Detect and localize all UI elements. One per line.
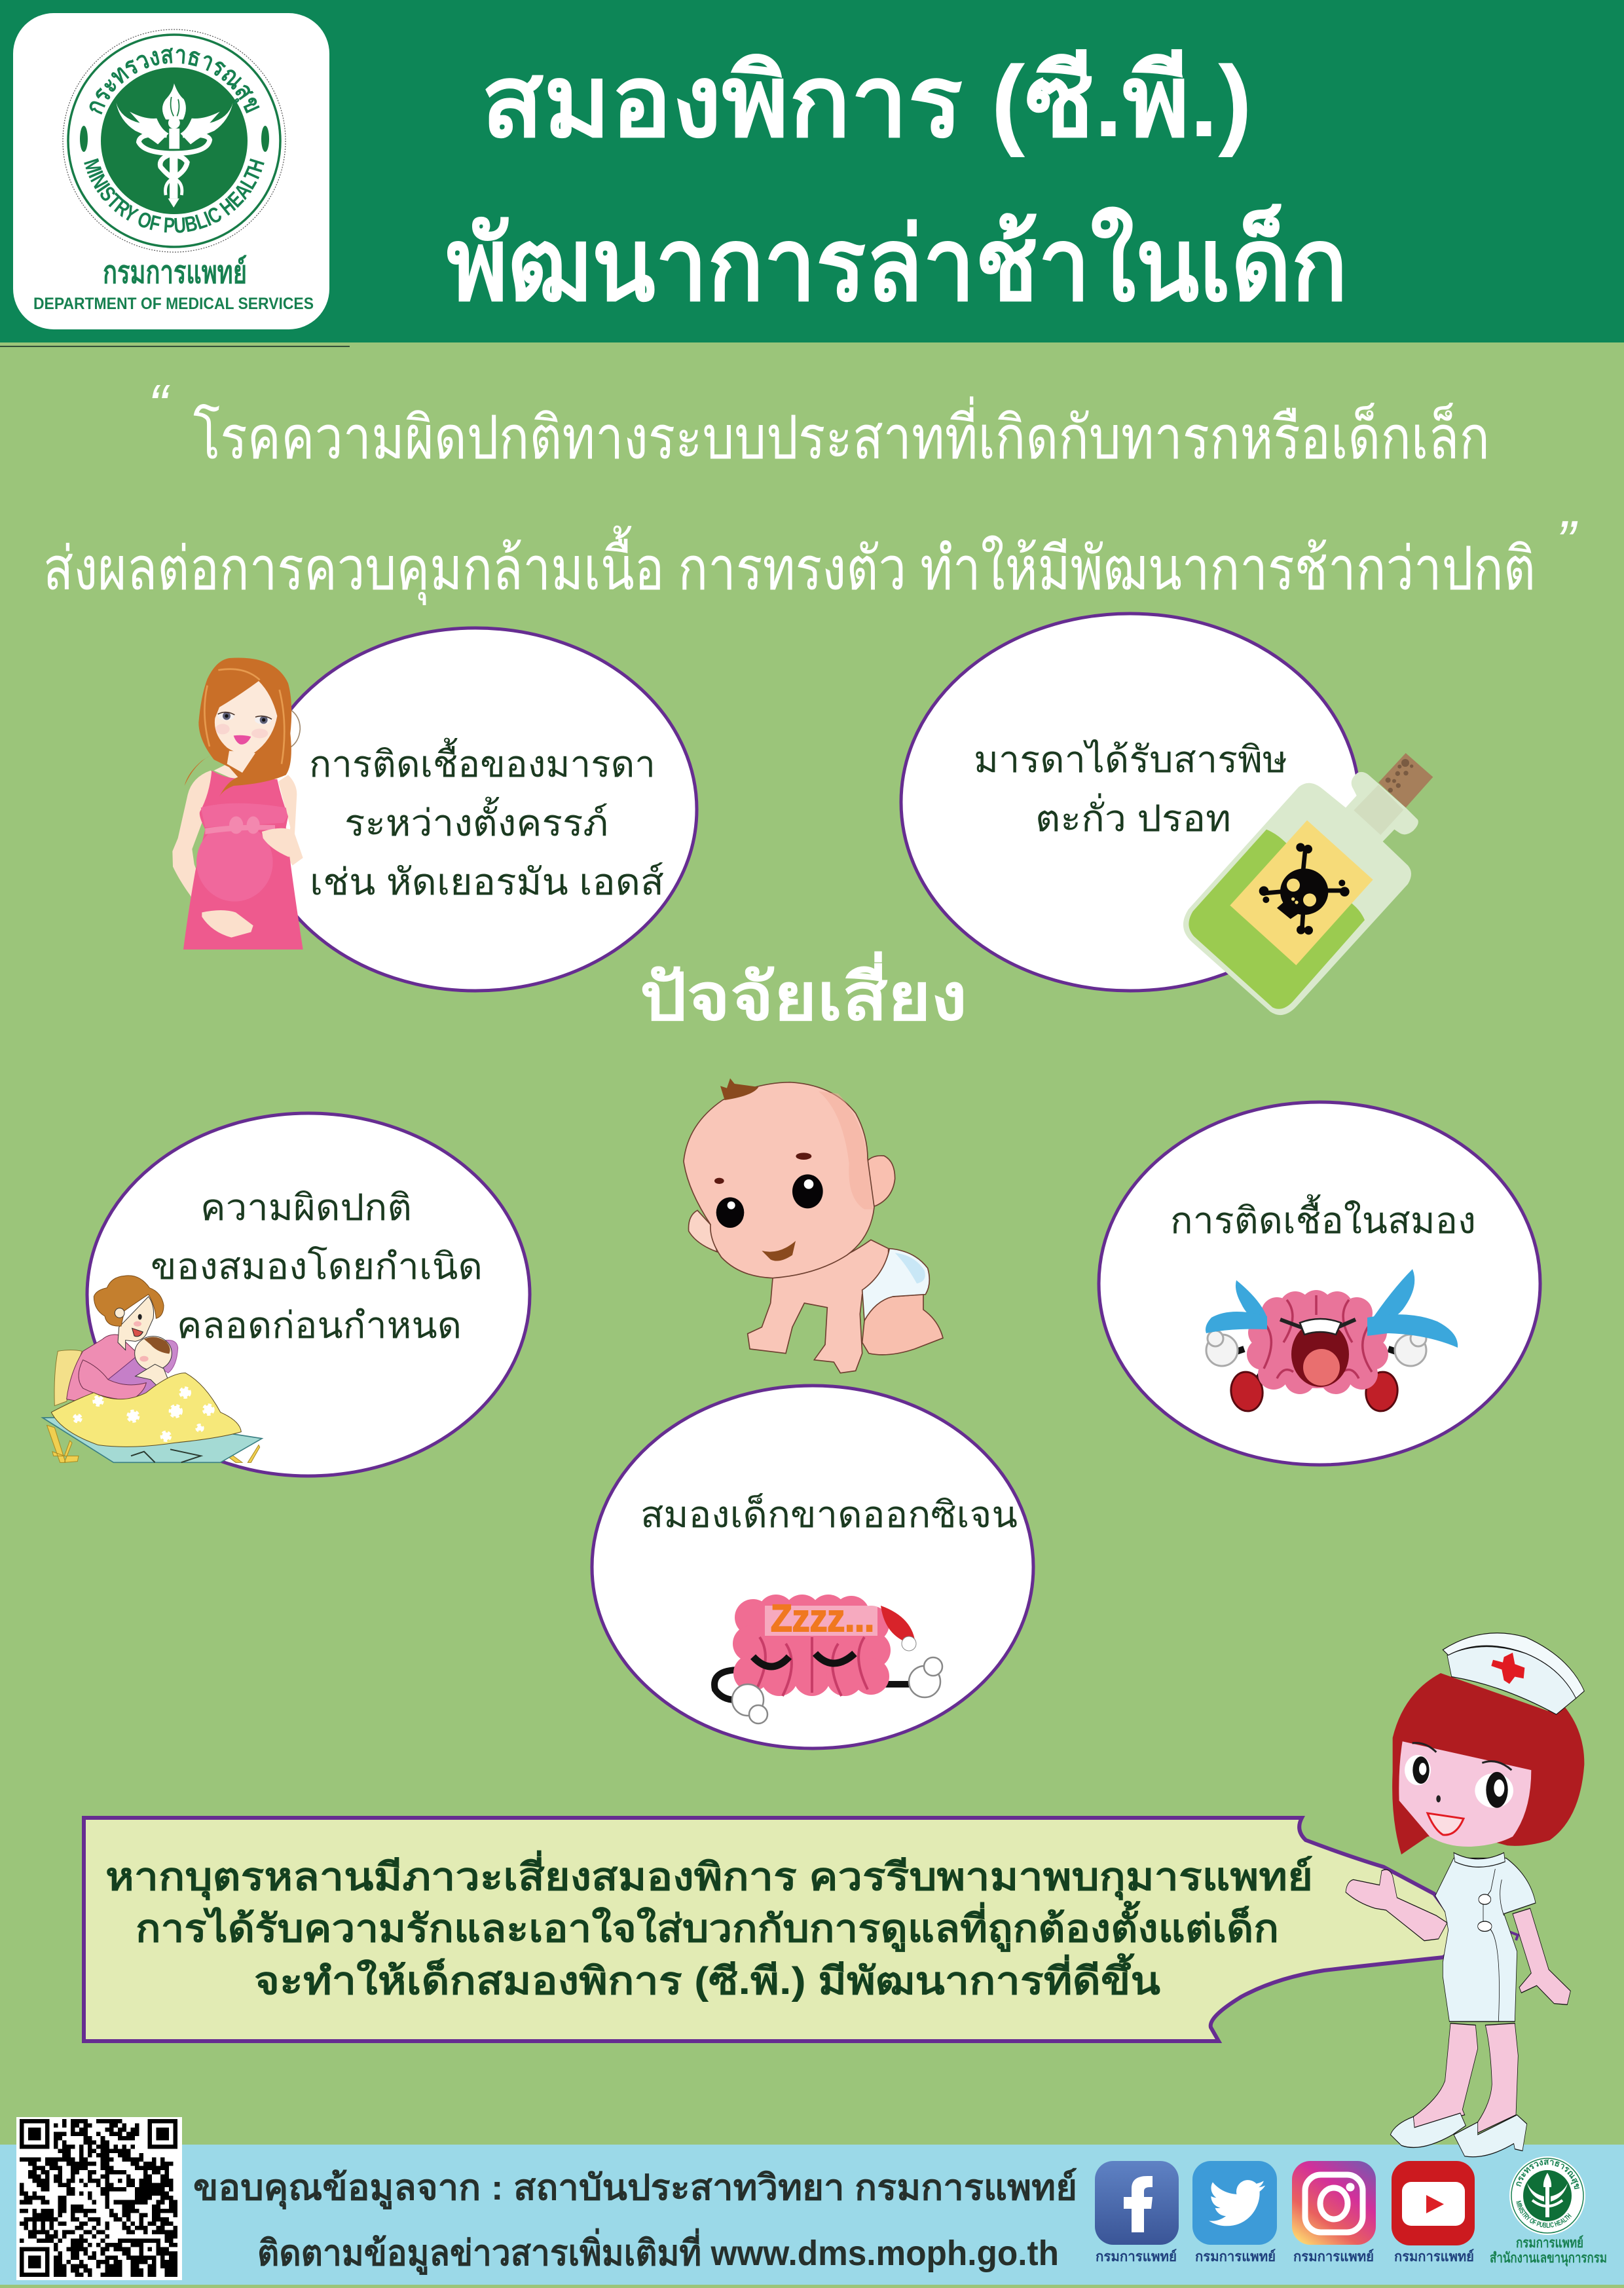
icon: poison bottle: [1183, 753, 1433, 1015]
icon: pregnant woman: [172, 657, 303, 950]
bubble: [1099, 1102, 1540, 1465]
logo ring text English: MINISTRY OF PUBLIC HEALTH: [84, 158, 265, 233]
icon: crawling baby: [684, 1079, 943, 1373]
bubble text: ความผิดปกติ: [200, 1187, 412, 1228]
callout line 1: หากบุตรหลานมีภาวะเสี่ยงสมองพิการ ควรรีบพามาพบกุมารแพทย์: [105, 1850, 1313, 1901]
heading: risk factors: ปัจจัยเสี่ยง: [640, 951, 967, 1034]
social icon: Facebook: [1095, 2161, 1179, 2264]
bubble text: ของสมองโดยกำเนิด: [151, 1245, 483, 1287]
logo card: Department of Medical Services: [13, 13, 329, 329]
bubble: [87, 1113, 530, 1476]
header band: [0, 0, 1624, 347]
logo English caption: DEPARTMENT OF MEDICAL SERVICES: [33, 295, 314, 313]
small logo ring text: กระทรวงสาธารณสุข: [1517, 2160, 1579, 2190]
bubble text: [974, 739, 1287, 839]
title line 2: พัฒนาการล่าช้าในเด็ก: [447, 204, 1348, 322]
panel: congenital abnormality and premature birth: [43, 1113, 530, 1476]
opening quote mark: “: [148, 373, 170, 439]
social icon: Instagram: [1292, 2161, 1376, 2264]
QR code: [16, 2117, 182, 2280]
bubble text: สมองเด็กขาดออกซิเจน: [640, 1492, 1018, 1535]
panel: oxygen deprivation: [592, 1386, 1033, 1748]
bubble text: [309, 738, 664, 902]
closing quote mark: ”: [1556, 509, 1578, 575]
title: [447, 45, 1348, 322]
logo Thai caption: กรมการแพทย์: [103, 255, 247, 290]
ornament right: [261, 126, 269, 152]
definition quote: [43, 373, 1578, 606]
bubble: [901, 614, 1359, 991]
footer band: [0, 2145, 1624, 2285]
callout line 3: จะทำให้เด็กสมองพิการ (ซี.พี.) มีพัฒนาการที่ดีขึ้น: [254, 1953, 1160, 2002]
panel: brain infection: [1099, 1102, 1540, 1465]
footer credit line: ขอบคุณข้อมูลจาก : สถาบันประสาทวิทยา กรมการแพทย์: [193, 2168, 1077, 2210]
bubble text: มารดาได้รับสารพิษ: [974, 739, 1287, 780]
bubble text: การติดเชื้อในสมอง: [1170, 1194, 1476, 1241]
icon: crying brain: [1206, 1269, 1458, 1413]
icon: sleeping brain: [714, 1595, 942, 1724]
footer website line: ติดตามข้อมูลข่าวสารเพิ่มเติมที่ www.dms.moph.go.th: [257, 2228, 1059, 2275]
bubble text: [151, 1187, 483, 1346]
label: กรมการแพทย์: [1195, 2249, 1276, 2264]
bubble text: คลอดก่อนกำหนด: [177, 1304, 462, 1346]
panel: toxin exposure: [901, 614, 1433, 1015]
callout line 2: การได้รับความรักและเอาใจใส่บวกกับการดูแลที่ถูกต้องตั้งแต่เด็ก: [136, 1901, 1279, 1952]
label: กรมการแพทย์: [1394, 2249, 1474, 2264]
small ministry logo with captions: [1490, 2156, 1607, 2267]
panel: maternal infection: [172, 628, 697, 991]
bubble: [254, 628, 697, 991]
label: กรมการแพทย์: [1293, 2249, 1374, 2264]
social icon: YouTube: [1392, 2161, 1475, 2264]
ornament left: [80, 126, 88, 152]
callout bubble: [84, 1818, 1518, 2041]
label: กรมการแพทย์: [1096, 2249, 1177, 2264]
bubble text: การติดเชื้อของมารดา: [309, 738, 655, 784]
emblem: winged caduceus: [116, 83, 233, 208]
small emblem: [1527, 2173, 1568, 2217]
nurse character: [1346, 1633, 1584, 2157]
title line 1: สมองพิการ (ซี.พี.): [481, 45, 1252, 158]
logo ring text Thai: กระทรวงสาธารณสุข: [89, 47, 260, 115]
social icon: Twitter: [1192, 2161, 1277, 2264]
bubble text: เช่น หัดเยอรมัน เอดส์: [310, 861, 664, 902]
icon: sleeping brain: Zzzz...: [771, 1597, 874, 1640]
icon: mother holding newborn: [43, 1276, 262, 1462]
bubble text: ตะกั่ว ปรอท: [1035, 793, 1231, 839]
small logo ring text English: MINISTRY OF PUBLIC HEALTH: [1516, 2200, 1572, 2228]
bubble: [592, 1386, 1033, 1748]
bubble text: ระหว่างตั้งครรภ์: [344, 797, 608, 843]
caption: กรมการแพทย์: [1516, 2235, 1583, 2251]
